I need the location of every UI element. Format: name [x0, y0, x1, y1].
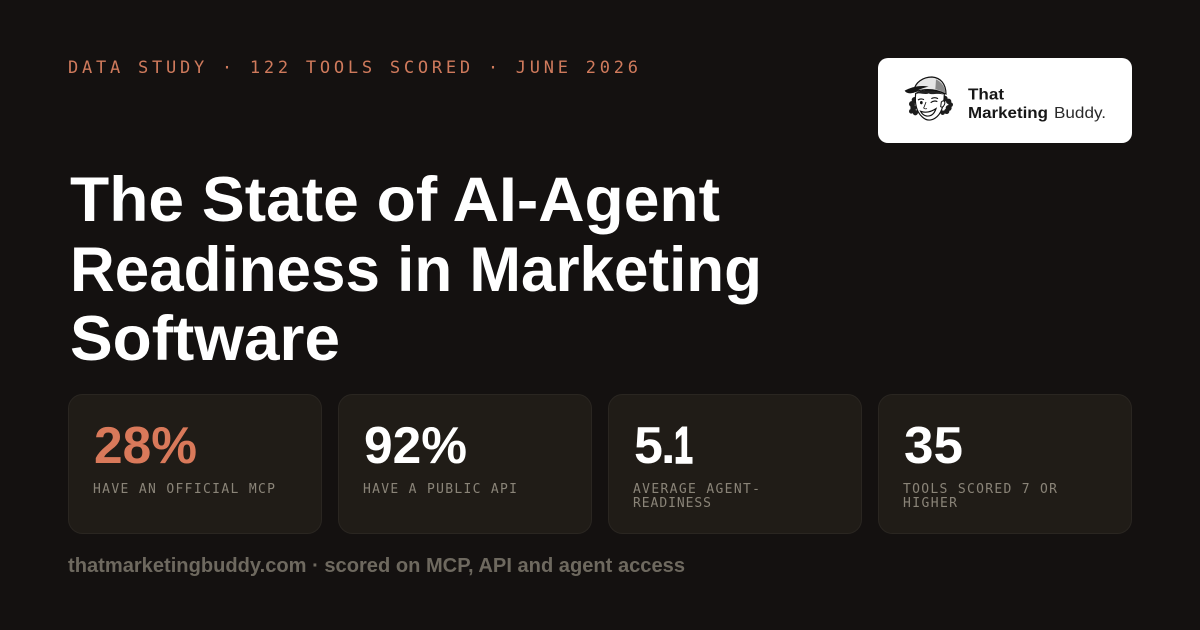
icon: winking mascot face with cap: [905, 77, 953, 120]
stat label: average agent-readiness: AVERAGE AGENT-: [633, 482, 760, 497]
stat number: 35: 35: [904, 417, 963, 475]
logo wordmark: Marketing: [968, 105, 1048, 122]
title: Readiness in Marketing: [70, 235, 762, 305]
logo wordmark: Buddy.: [1054, 105, 1106, 122]
stat label: official MCP: HAVE AN OFFICIAL MCP: [93, 482, 275, 497]
logo wordmark: That: [968, 86, 1004, 104]
stat label: tools scored 7 or higher: TOOLS SCORED 7 OR: [903, 482, 1057, 497]
panel: public API stat: [338, 394, 592, 534]
title: Software: [70, 304, 340, 374]
title: [70, 165, 762, 374]
stat label: tools scored 7 or higher: HIGHER: [903, 496, 957, 511]
stat label: average agent-readiness: READINESS: [633, 496, 711, 511]
logo card: [878, 58, 1132, 143]
stat label: average agent-readiness: [633, 482, 760, 511]
stat number: 92%: 92%: [364, 417, 467, 475]
footer text: thatmarketingbuddy.com · scored on MCP, API and agent access: [68, 555, 685, 577]
stat number: 5.1: 5: [634, 417, 663, 475]
panel: tools scored stat: [878, 394, 1132, 534]
eyebrow: data study line: DATA STUDY · 122 TOOLS SCORED · JUNE 2026: [68, 58, 638, 78]
logo wordmark: [968, 86, 1106, 122]
stat number: 28%: 28%: [94, 417, 197, 475]
stat label: public API: HAVE A PUBLIC API: [363, 482, 517, 497]
stat label: tools scored 7 or higher: [903, 482, 1057, 511]
title: The State of AI-Agent: [70, 165, 720, 235]
panel: average readiness stat: [608, 394, 862, 534]
stat number: 5.1: [634, 417, 693, 475]
stat number: 5.1: .: [661, 417, 675, 475]
panel: official MCP stat: [68, 394, 322, 534]
stat number: 5.1: 1: [674, 417, 693, 475]
